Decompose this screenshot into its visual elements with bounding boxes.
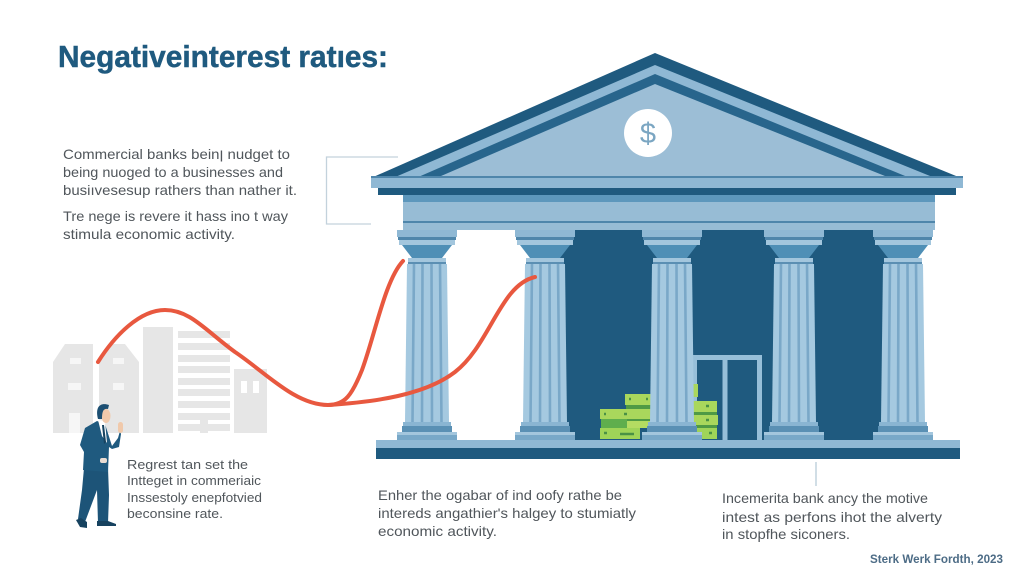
entablature [371, 178, 963, 230]
text block: commercial banks: Commercial banks beinן nudget to [63, 146, 290, 162]
text block: bottom right: intest as perfons ihot the alverty [722, 509, 942, 525]
icon: city buildings [53, 327, 267, 433]
connector tick [815, 462, 817, 486]
text block: regrest: beconsine rate. [127, 506, 223, 521]
dark interior [560, 230, 895, 440]
money stacks [600, 384, 718, 439]
shoes [76, 518, 87, 528]
columns [397, 230, 933, 440]
text block: regrest: Inssestoly enepfotvied [127, 490, 262, 505]
building illustration: bank [371, 53, 963, 459]
trousers [78, 468, 109, 523]
door [694, 358, 760, 440]
jacket [80, 421, 121, 472]
text block: bottom centre: intereds angathier's halgey to stumiatly [378, 505, 636, 521]
red interest rate curves [98, 261, 535, 405]
text block: regrest: Regrest tan set the [127, 457, 248, 472]
text block: commercial banks: stimula economic activity. [63, 226, 235, 242]
icon: businessman [76, 404, 123, 528]
text block: bottom right: in stopfhe siconers. [722, 526, 850, 542]
head [102, 409, 110, 423]
text block: commercial banks: Tre nege is revere it hass ino t way [63, 208, 288, 224]
source credit: Sterk Werk Fordth, 2023 [870, 554, 1003, 566]
text block: bottom centre: economic activity. [378, 523, 497, 539]
text block: bottom centre: Enher the ogabar of ind oofy rathe be [378, 487, 622, 503]
floor [376, 440, 960, 459]
text block: bottom right: Incemerita bank ancy the motive [722, 490, 928, 506]
title: Negativeinterest ratıes: [58, 39, 388, 74]
text block: commercial banks [63, 146, 297, 242]
text block: regrest [127, 457, 262, 521]
hands [118, 422, 123, 433]
text block: commercial banks: busiıvesesup rathers than nather it. [63, 182, 297, 198]
pediment roof [371, 53, 963, 178]
icon: dollar medallion [624, 109, 672, 157]
shirt and tie [98, 420, 107, 443]
text block: regrest: Intteget in commeriaic [127, 473, 262, 488]
icon: dollar medallion: $ [640, 118, 656, 150]
text block: bottom right [722, 490, 942, 542]
text block: bottom centre [378, 487, 636, 539]
text block: commercial banks: being nuoged to a businesses and [63, 164, 283, 180]
bracket connector [326, 157, 398, 224]
